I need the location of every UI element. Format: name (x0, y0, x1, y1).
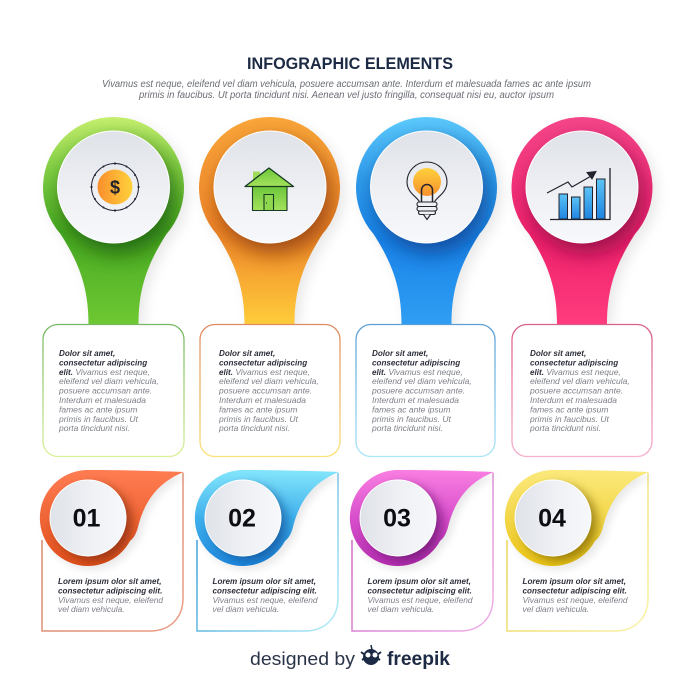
text block: primis in faucibus. Ut (218, 414, 299, 424)
text block: elit. (59, 368, 73, 377)
text block: Dolor sit amet, (59, 349, 115, 358)
text block: consectetur adipiscing (530, 358, 618, 367)
text block (522, 577, 628, 614)
panel: orange text box (200, 324, 340, 456)
text block: primis in faucibus. Ut (529, 414, 610, 424)
text block: Vivamus est neque, eleifend (58, 595, 163, 605)
text block: Interdum et malesuada (372, 395, 459, 405)
text block: consectetur adipiscing elit. (212, 586, 317, 596)
panel: pink pin (512, 117, 658, 329)
panel: blue text box (356, 324, 495, 456)
footer: designed by freepik (250, 645, 450, 670)
text block: vel diam vehicula. (368, 604, 434, 614)
text block: fames ac ante ipsum (530, 404, 608, 414)
panel: pink text box (512, 324, 652, 456)
text block: eleifend vel diam vehicula, (530, 376, 630, 386)
text block: consectetur adipiscing elit. (58, 586, 162, 596)
text block: fames ac ante ipsum (219, 404, 297, 414)
text block: Vivamus est neque, eleifend (212, 595, 318, 605)
text block: porta tincidunt nisi. (371, 423, 443, 433)
text block: porta tincidunt nisi. (218, 423, 290, 433)
text block: Dolor sit amet, (372, 349, 428, 358)
text block: posuere accumsan ante. (529, 386, 623, 396)
text block: fames ac ante ipsum (59, 404, 137, 414)
title: INFOGRAPHIC ELEMENTS (247, 55, 453, 73)
text block: fames ac ante ipsum (372, 404, 450, 414)
text block: vel diam vehicula. (522, 604, 589, 614)
text block: primis in faucibus. Ut (371, 414, 452, 424)
text block: elit. (530, 368, 544, 377)
text block: eleifend vel diam vehicula, (219, 376, 319, 386)
panel: green pin (43, 117, 189, 329)
text block: Vivamus est neque, (386, 367, 463, 377)
subtitle: Vivamus est neque, eleifend vel diam vehicula, posuere accumsan ante. Interdum et malesuada fames ac ante ipsum (102, 79, 591, 90)
text block: Interdum et malesuada (530, 395, 617, 405)
text block: Lorem ipsum olor sit amet, (58, 577, 161, 586)
icon: growth chart (547, 168, 610, 220)
text block: Lorem ipsum olor sit amet, (212, 577, 316, 586)
text block: Dolor sit amet, (530, 349, 586, 358)
text block: Vivamus est neque, (233, 367, 310, 377)
text block: Dolor sit amet, (219, 349, 275, 358)
text block: posuere accumsan ante. (58, 386, 152, 396)
text block: Interdum et malesuada (59, 395, 146, 405)
text block: posuere accumsan ante. (371, 386, 465, 396)
icon: freepik mascot (361, 645, 381, 665)
icon: house (245, 168, 294, 210)
text block: elit. (219, 368, 233, 377)
text block: porta tincidunt nisi. (58, 423, 130, 433)
panel: card 04 (505, 470, 653, 631)
text block: primis in faucibus. Ut (58, 414, 139, 424)
footer: designed by freepik: freepik (387, 649, 450, 670)
text block: Lorem ipsum olor sit amet, (368, 577, 471, 586)
text block: Vivamus est neque, eleifend (368, 595, 473, 605)
text block: posuere accumsan ante. (218, 386, 312, 396)
text block: consectetur adipiscing elit. (368, 586, 472, 596)
text block: Vivamus est neque, (73, 367, 150, 377)
text block: porta tincidunt nisi. (529, 423, 601, 433)
number: 03 (383, 504, 411, 532)
text block: Vivamus est neque, eleifend (522, 595, 628, 605)
text block: vel diam vehicula. (58, 604, 125, 614)
text block (212, 577, 318, 614)
text block: consectetur adipiscing (372, 358, 460, 367)
text block: consectetur adipiscing elit. (522, 586, 627, 596)
icon: dollar coin: $ (110, 178, 120, 198)
text block: Vivamus est neque, (544, 367, 621, 377)
panel: card 01 (40, 470, 188, 631)
text block: elit. (372, 368, 386, 377)
icon: dollar coin (90, 162, 140, 212)
text block (58, 577, 163, 614)
panel: card 03 (350, 470, 498, 631)
text block: consectetur adipiscing (219, 358, 307, 367)
subtitle: primis in faucibus. Ut porta tincidunt nisi. Aenean vel justo fringilla, consequat nisi eu, auctor ipsum (138, 90, 554, 101)
text block: consectetur adipiscing (59, 358, 147, 367)
text block: Interdum et malesuada (219, 395, 306, 405)
text block: Lorem ipsum olor sit amet, (522, 577, 626, 586)
footer: designed by freepik: designed by (250, 649, 355, 669)
number: 01 (73, 504, 100, 532)
panel: green text box (43, 324, 184, 456)
panel: orange pin (199, 117, 345, 329)
text block: eleifend vel diam vehicula, (372, 376, 472, 386)
number: 02 (228, 504, 256, 532)
subtitle (102, 79, 591, 101)
number: 04 (538, 504, 566, 532)
icon: light bulb (407, 162, 447, 220)
panel: blue pin (356, 117, 502, 329)
text block: eleifend vel diam vehicula, (59, 376, 159, 386)
text block: vel diam vehicula. (212, 604, 279, 614)
text block (368, 577, 473, 614)
panel: card 02 (195, 470, 343, 631)
